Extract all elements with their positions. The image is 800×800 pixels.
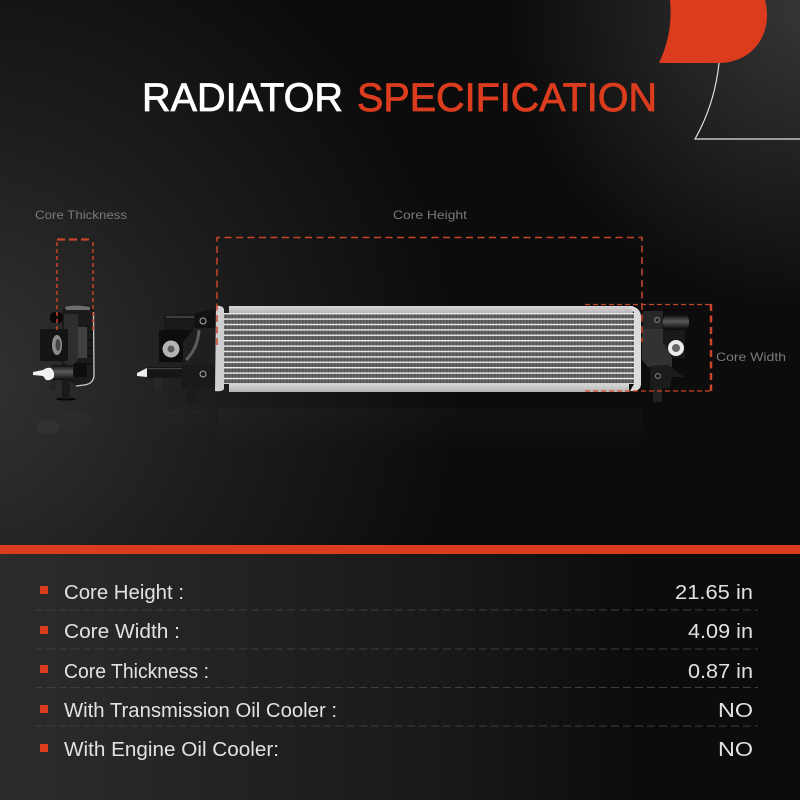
left end tank: [137, 309, 216, 403]
row: core width: [40, 621, 753, 643]
left: bushing: [162, 340, 180, 358]
row: core width: Core Width :: [64, 621, 180, 643]
left: small stem: [155, 378, 162, 390]
side view: mounting bracket: [40, 329, 68, 361]
right: upper bracket: [643, 311, 663, 329]
radiator top plate: [229, 306, 633, 314]
title: RADIATOR: [142, 76, 343, 120]
row: core height: 21.65 in: [675, 582, 753, 604]
left: arm highlight: [166, 316, 194, 318]
side view: bushing hole: [56, 339, 60, 351]
row: engine oil cooler: NO: [718, 739, 753, 761]
radiator fin core: [224, 313, 635, 384]
right: mount block: [663, 330, 685, 358]
left: mount block: [159, 330, 193, 362]
left: upper bracket: [195, 309, 216, 345]
right: bushing hole: [672, 344, 680, 352]
left: white nozzle: [137, 368, 147, 377]
dashed callout: core height: [217, 238, 642, 345]
left: pipe highlight: [148, 368, 182, 369]
reflection of the product: [36, 408, 642, 450]
row: core width: 4.09 in: [688, 621, 753, 643]
row: core height: [40, 582, 753, 604]
side view: central shading: [64, 314, 78, 368]
right: bushing: [668, 340, 684, 356]
title: SPECIFICATION: [357, 76, 657, 120]
right: upper bolt: [654, 318, 660, 322]
side view: upper pipe: [50, 312, 63, 323]
side view: white nozzle: [33, 368, 54, 380]
title: [142, 76, 657, 120]
side view: bushing: [52, 335, 62, 355]
radiator right header: [628, 306, 641, 391]
left: neck highlight: [186, 330, 199, 360]
row: transmission oil cooler: With Transmission Oil Cooler :: [64, 700, 337, 722]
side view: lower stem: [62, 378, 70, 399]
side view of radiator: [33, 305, 94, 400]
row: core thickness: Core Thickness :: [64, 661, 209, 683]
row: engine oil cooler: With Engine Oil Cooler:: [64, 739, 279, 761]
row: core height: Core Height :: [64, 582, 184, 604]
side view: rim ticks: [88, 332, 93, 364]
side view: lower bracket: [74, 363, 87, 377]
right end tank: [642, 311, 689, 402]
row: engine oil cooler: [40, 739, 753, 761]
side view: ground shadow: [56, 398, 76, 400]
main radiator: [137, 306, 689, 403]
left: lower bolt: [200, 371, 206, 377]
left: lower pipe: [147, 367, 184, 378]
right: stem: [653, 388, 662, 402]
side view: tank body: [62, 305, 94, 385]
label: core thickness: Core Thickness: [35, 208, 127, 222]
decorative red corner shape: [659, 0, 767, 63]
right: lower bolt: [656, 374, 660, 378]
row: core thickness: [40, 661, 753, 683]
decorative white outline: [695, 63, 800, 139]
radiator left header: [215, 306, 224, 391]
panel background: [0, 554, 800, 800]
side view: small stem: [50, 378, 56, 390]
right: upper pipe: [663, 315, 689, 329]
left: bracket bolt: [200, 318, 206, 324]
specification panel: [0, 545, 800, 800]
dashed callout: core thickness: [57, 239, 93, 330]
red divider bar: [0, 545, 800, 554]
side view: top speckle: [65, 306, 90, 310]
background: [0, 0, 800, 545]
dashed callout: core width: [585, 304, 711, 391]
row: transmission oil cooler: NO: [718, 700, 753, 722]
row: transmission oil cooler: [40, 700, 753, 722]
radiator bottom plate: [229, 384, 629, 392]
left: lower bracket: [182, 365, 216, 389]
side view: rim: [76, 312, 94, 386]
left: curved tank neck: [183, 328, 216, 368]
side view: lower pipe: [52, 365, 73, 380]
left: stem: [187, 388, 196, 403]
row: core thickness: 0.87 in: [688, 661, 753, 683]
label: core height: Core Height: [393, 208, 468, 222]
left: bushing hole: [168, 346, 174, 352]
left: upper mounting arm: [164, 313, 195, 330]
label: core width: Core Width: [716, 350, 786, 364]
right: tank neck: [642, 328, 672, 367]
side view: grey panel: [78, 327, 87, 358]
right: lower bracket: [650, 365, 684, 388]
